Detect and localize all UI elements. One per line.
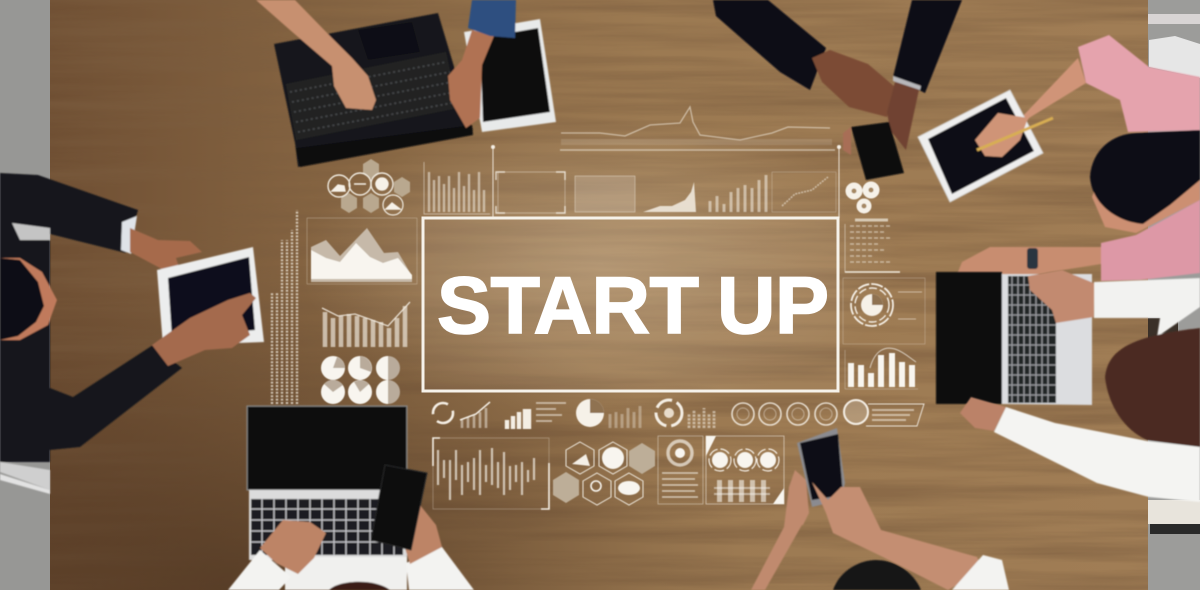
hand: [960, 397, 1006, 431]
person: bottom right, phone: [751, 428, 1009, 590]
right hand: [404, 505, 442, 564]
hologram: chart row above title: [424, 162, 836, 214]
hair: [833, 560, 921, 590]
hologram: report panel: [658, 436, 703, 504]
hand on tablet top: [130, 228, 202, 288]
chart: candlesticks: [433, 438, 549, 509]
person: right, pink shirt with tablet: [918, 35, 1200, 302]
head at bottom: [329, 582, 390, 590]
phone: [371, 465, 427, 550]
hologram: text table right: [845, 220, 900, 272]
head: [0, 258, 57, 340]
icon: hexagon cluster top left: [328, 159, 410, 215]
arm: [950, 247, 1101, 302]
laptop with keyboard: [274, 13, 473, 167]
laptop: right: [936, 270, 1096, 405]
laptop: bottom left: [228, 406, 474, 590]
chart: pie grid: [321, 356, 400, 404]
title frame: [423, 218, 838, 391]
person: top, laptop and tablet: [256, 0, 556, 167]
tablet: [157, 247, 264, 346]
hair: [1105, 328, 1200, 447]
sleeve: [994, 407, 1200, 502]
icon: hexagon cluster bottom: [553, 442, 655, 505]
hand on keyboard: [1028, 270, 1096, 323]
hand and arm: [812, 482, 983, 590]
icon: key shaped widget: [844, 400, 924, 426]
pencil: [977, 118, 1053, 150]
hand on tablet bottom: [152, 293, 256, 366]
hologram: connector lines with dots: [491, 145, 841, 218]
tablet: [918, 90, 1043, 202]
title: UP: [717, 261, 829, 351]
arm and hand on keyboard: [256, 0, 376, 110]
title: START: [437, 261, 698, 351]
icon: gears: [846, 182, 879, 213]
phone: [797, 428, 845, 507]
chart: radial pie right: [843, 278, 925, 344]
hand and blue sleeve: [448, 30, 494, 128]
papers: [285, 557, 407, 590]
person: right, white blouse: [960, 278, 1200, 502]
hair: [1090, 130, 1200, 224]
hologram: tall bar column left: [272, 210, 297, 404]
hologram: dial dashboard: [706, 436, 784, 504]
chart: bars with line: [322, 302, 410, 347]
person: left, dark suit with tablet: [0, 173, 264, 494]
tablet: [464, 19, 556, 132]
person: top right, black suit: [713, 0, 962, 180]
sleeves: [228, 550, 291, 590]
chart: bars right: [845, 348, 918, 389]
phone: [843, 127, 851, 155]
hologram: small widgets below title: [433, 399, 837, 429]
hologram: stock line chart top: [560, 107, 835, 150]
face and pink shoulder: [1092, 175, 1200, 233]
sleeve: [952, 555, 1009, 590]
left hand: [260, 520, 326, 574]
chart: mountain area: [307, 218, 417, 284]
